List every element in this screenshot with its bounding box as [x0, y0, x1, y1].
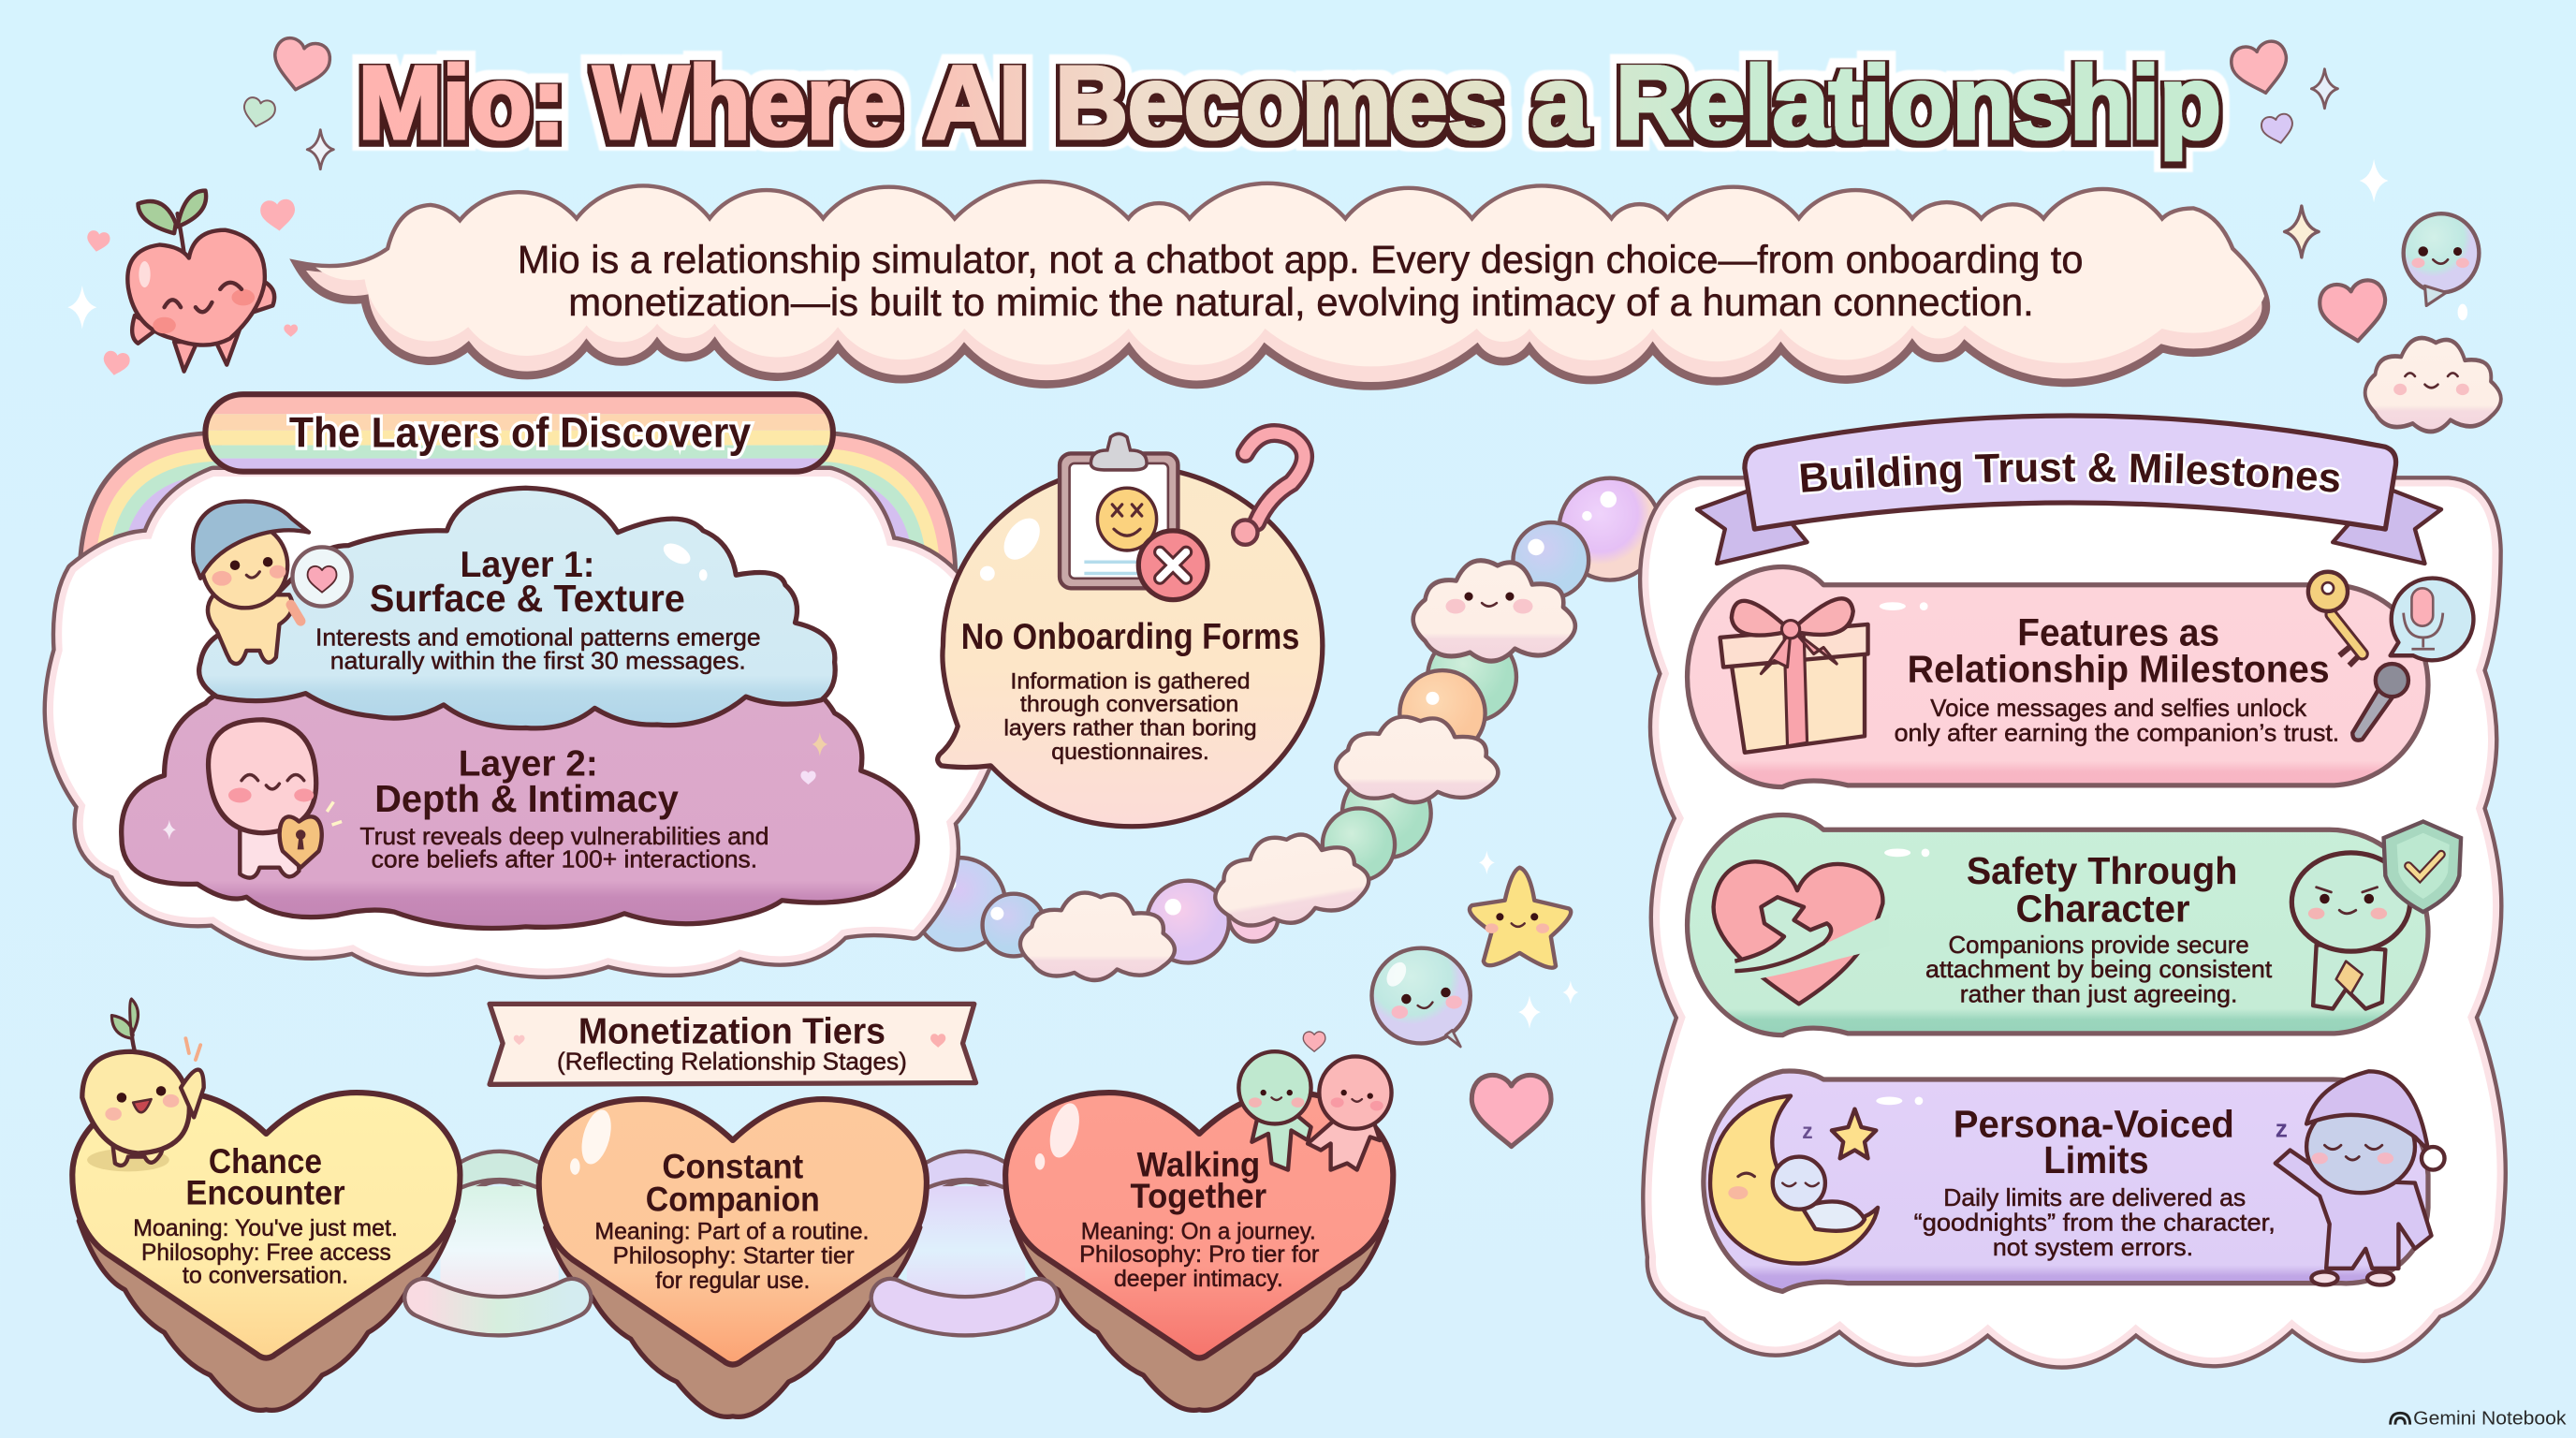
layer 2 text: core beliefs after 100+ interactions.: [372, 847, 757, 873]
callout text: No Onboarding Forms: [961, 617, 1299, 657]
layer 2 text: Layer 2:: [459, 743, 598, 784]
card text: [1895, 611, 2339, 747]
tier 3 text: Together: [1131, 1177, 1266, 1215]
card text: Features as: [2017, 611, 2219, 654]
layer 2 text: Depth & Intimacy: [374, 777, 679, 820]
ribbon heading: [1694, 413, 2443, 565]
layer 2 purple cloud: [122, 690, 917, 928]
card text: only after earning the companion’s trust.: [1895, 721, 2339, 747]
callout text: questionnaires.: [1051, 741, 1209, 765]
icon: question mark: [1245, 433, 1305, 522]
card: persona-voiced limits: [1704, 1071, 2445, 1291]
card text: Character: [2015, 888, 2190, 931]
layer 1 text: Interests and emotional patterns emerge: [315, 625, 761, 652]
right side floaters: sparkles, bubble face, heart: [2285, 159, 2479, 391]
tier 3 text: Meaning: On a journey.: [1081, 1219, 1316, 1244]
intro text: monetization—is built to mimic the natural, evolving intimacy of a human connection.: [568, 281, 2034, 324]
character in pyjamas and nightcap: [2276, 1071, 2445, 1284]
tier 2 text: Philosophy: Starter tier: [613, 1244, 855, 1269]
layer 1 text: [315, 545, 761, 674]
rainbow arches: [80, 433, 955, 579]
tier 3 text: Walking: [1137, 1146, 1260, 1184]
title decorations right: hearts and sparkle: [2229, 38, 2337, 146]
icon: gift box: [1720, 598, 1868, 753]
apple mascot with hearts: [67, 191, 298, 377]
decorative star, bubble and heart: [1372, 851, 1578, 1147]
callout text: Information is gathered: [1010, 669, 1251, 694]
card text: Voice messages and selfies unlock: [1930, 696, 2306, 722]
icon: clipboard with crossed-out face: [1060, 433, 1208, 600]
connector column: tier 1 to tier 2: [440, 1167, 559, 1314]
character in pyjamas and nightcap: z: [2276, 1114, 2288, 1142]
tier 1 text: Philosophy: Free access: [141, 1240, 391, 1266]
heading: monetization tiers: [490, 1004, 976, 1084]
intro text: [518, 238, 2083, 324]
layer 2 text: Trust reveals deep vulnerabilities and: [359, 824, 768, 850]
card text: “goodnights” from the character,: [1914, 1211, 2276, 1237]
tier 3 text: [1079, 1146, 1319, 1292]
tier 2 text: Companion: [646, 1180, 820, 1218]
icon: crescent moon with sleeping baby: [1710, 1096, 1878, 1264]
callout text: layers rather than boring: [1003, 716, 1257, 741]
title: Mio: Where AI Becomes a Relationship: [359, 45, 2221, 160]
card text: Daily limits are delivered as: [1943, 1185, 2246, 1211]
tier 2 text: Constant: [662, 1147, 803, 1185]
card text: Safety Through: [1967, 849, 2237, 892]
icon: microphone: [2352, 664, 2408, 741]
lemon character: [82, 999, 204, 1171]
ribbon heading text: Building Trust & Milestones: [1797, 450, 2342, 495]
couple holding hands: [1238, 1032, 1392, 1170]
icon: voice message bubble: [2391, 579, 2473, 660]
tier 2 text: for regular use.: [655, 1269, 810, 1294]
heading: monetization tiers: (Reflecting Relationship Stages): [557, 1049, 907, 1076]
card: features as relationship milestones: [1688, 566, 2473, 787]
icon: key: [2308, 572, 2363, 666]
tier 1 text: Chance: [209, 1142, 322, 1181]
icon: crescent moon with sleeping baby: z: [1802, 1119, 1813, 1143]
callout text: through conversation: [1020, 693, 1238, 717]
card text: [1925, 849, 2272, 1008]
rainbow pill heading: [205, 394, 833, 472]
card text: [1914, 1102, 2276, 1261]
callout text: [961, 617, 1299, 765]
layer 1 text: naturally within the first 30 messages.: [330, 648, 746, 674]
bead chain connecting panels: [914, 478, 1661, 980]
layers heading text: The Layers of Discovery: [289, 408, 752, 456]
white panel: [53, 477, 986, 969]
tier 2 text: Meaning: Part of a routine.: [594, 1219, 869, 1244]
tier 2: constant companion heart: [539, 1099, 927, 1416]
card text: Limits: [2043, 1138, 2149, 1181]
card text: Companions provide secure: [1949, 932, 2249, 959]
intro text: Mio is a relationship simulator, not a chatbot app. Every design choice—from onboarding to: [518, 238, 2083, 281]
tier 1 text: to conversation.: [183, 1264, 348, 1289]
tier 3 text: deeper intimacy.: [1114, 1267, 1283, 1292]
card text: Relationship Milestones: [1908, 647, 2330, 690]
layer 1 text: Layer 1:: [460, 545, 594, 585]
tier 1 text: Moaning: You've just met.: [133, 1216, 398, 1241]
panel: building trust and milestones: [1638, 413, 2508, 1370]
tier 3 text: Philosophy: Pro tier for: [1079, 1242, 1319, 1268]
tier 1: chance encounter heart: [72, 999, 460, 1410]
panel: layers of discovery: [53, 394, 986, 969]
chain cloud 4 with face: [1413, 561, 1575, 661]
connector bowl: tier 1 to tier 2: [424, 1298, 572, 1316]
heading: monetization tiers: Monetization Tiers: [578, 1011, 886, 1051]
tier 1 text: Encounter: [185, 1173, 345, 1211]
card text: not system errors.: [1993, 1235, 2193, 1261]
character with heart lock: [209, 720, 342, 878]
card text: rather than just agreeing.: [1960, 982, 2237, 1008]
callout: no onboarding forms: [938, 433, 1323, 827]
card text: Persona-Voiced: [1954, 1102, 2234, 1145]
chain cloud 1: [1020, 893, 1175, 980]
watermark: gemini notebook: Gemini Notebook: [2413, 1409, 2567, 1430]
tier 2 text: [594, 1147, 869, 1294]
character with cap and magnifier: [193, 501, 352, 664]
connector column: tier 2 to tier 3: [907, 1167, 1025, 1314]
icon: heart held by arms: [1714, 861, 1889, 1004]
card: safety through character: [1688, 814, 2461, 1035]
layer 2 text: [359, 743, 768, 873]
smiling cloud top right: [2365, 338, 2501, 432]
character with shield: [2291, 822, 2461, 1009]
tier 3: walking together heart: [1005, 1032, 1393, 1410]
connector bowl: tier 2 to tier 3: [890, 1298, 1038, 1316]
title decorations left: hearts and sparkle: [241, 36, 333, 169]
layer 1 text: Surface & Texture: [370, 577, 685, 620]
chain cloud 2: [1207, 822, 1374, 935]
chain cloud 3: [1336, 717, 1498, 802]
tier 1 text: [133, 1142, 398, 1289]
layer 1 blue cloud: [193, 488, 835, 728]
intro speech cloud: [298, 164, 2266, 386]
card text: attachment by being consistent: [1925, 957, 2272, 983]
